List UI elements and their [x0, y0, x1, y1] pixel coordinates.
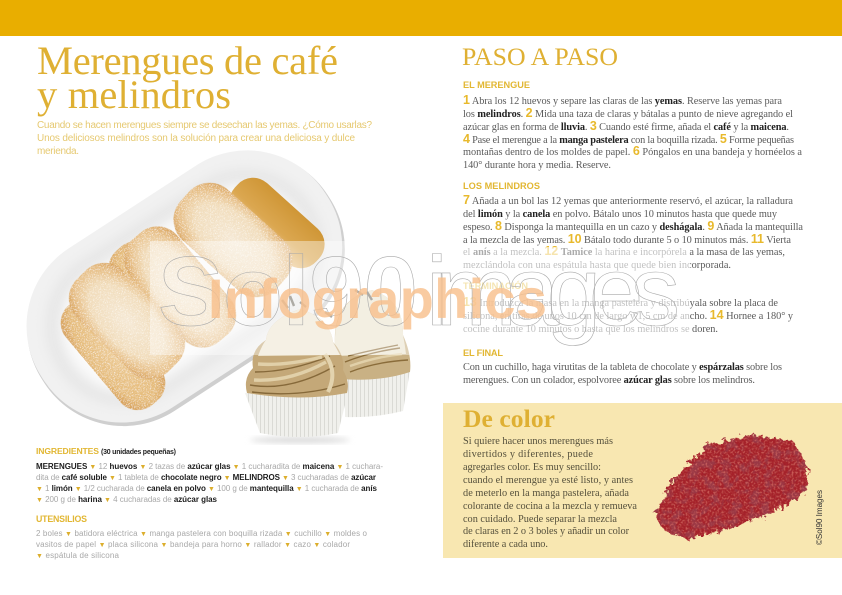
panel background	[443, 403, 842, 558]
section: el merengue: montañas dentro de los moldes de papel. 6 Póngalos en una bandeja y hornéelos a	[463, 144, 802, 158]
panel text: de claras en 2 o 3 boles y añadir un color	[463, 526, 630, 537]
section: el final: Con un cuchillo, haga virutitas de la tableta de chocolate y espárzalas sobre los	[463, 362, 782, 373]
title	[37, 38, 338, 117]
panel text: colorante de cocina a la mezcla y remueva	[463, 501, 637, 512]
utensils list: vasitos de papel ▼ placa silicona ▼ bandeja para horno ▼ rallador ▼ cazo ▼ colador	[36, 540, 350, 549]
photo: cupcakes	[245, 290, 410, 443]
utensils list: 2 boles ▼ batidora eléctrica ▼ manga pastelera con boquilla rizada ▼ cuchillo ▼ moldes o	[36, 529, 368, 538]
section: los melindros: espeso. 8 Disponga la mantequilla en un cazo y deshágala. 9 Añada la mantequilla	[463, 219, 803, 233]
section: los melindros: mezclándola con una espátula hasta que quede bien incorporada.	[463, 260, 731, 271]
section: los melindros	[463, 181, 803, 271]
section: el merengue: 140° durante hora y media. Reserve.	[463, 160, 611, 171]
panel heading: De color	[463, 404, 555, 433]
photo credit: ©Sol90 Images	[815, 490, 824, 545]
section: los melindros: LOS MELINDROS	[463, 181, 540, 191]
melindro: bottom biscuit	[51, 286, 175, 420]
melindro: front biscuit	[58, 252, 196, 390]
section: terminación: TERMINACIÓN	[463, 280, 528, 291]
melindro: middle biscuit	[100, 232, 210, 348]
section: terminación: 13 Introduzca la masa en la manga pastelera y distribúyala sobre la placa de	[463, 295, 778, 309]
heading: paso a paso: PASO A PASO	[462, 42, 618, 71]
panel text	[463, 436, 637, 550]
cupcake shadow	[250, 437, 350, 443]
section: los melindros: a la mezcla de las yemas. 10 Bátalo todo durante 5 o 10 minutos más. 11 Vierta	[463, 232, 791, 246]
watermark: Infographics: Infographics	[208, 267, 547, 330]
section: el merengue: azúcar glas en forma de lluvia. 3 Cuando esté firme, añada el café y la maicena.	[463, 119, 789, 133]
intro text	[37, 120, 372, 157]
top yellow bar	[0, 0, 842, 36]
panel text: de meterlo en la manga pastelera, añada	[463, 488, 629, 499]
watermark panel	[150, 241, 690, 355]
ingredients list: ▼ 1 limón ▼ 1/2 cucharada de canela en polvo ▼ 100 g de mantequilla ▼ 1 cucharada de anís	[36, 484, 378, 493]
ingredients list: MERENGUES ▼ 12 huevos ▼ 2 tazas de azúcar glas ▼ 1 cucharadita de maicena ▼ 1 cuchara-	[36, 462, 383, 471]
photo: plate with melindros	[0, 114, 381, 462]
ingredients heading	[36, 446, 176, 456]
section: el merengue: los melindros. 2 Mida una taza de claras y bátalas a punto de nieve agregando el	[463, 106, 793, 120]
plate	[0, 114, 381, 462]
section: el merengue: 1 Abra los 12 huevos y separe las claras de las yemas. Reserve las yemas para	[463, 93, 782, 107]
section: terminación	[463, 280, 794, 335]
melindro: centre biscuit	[113, 216, 247, 358]
utensils heading: UTENSILIOS	[36, 514, 87, 524]
panel text: Si quiere hacer unos merengues más	[463, 436, 613, 447]
ingredients list	[36, 462, 383, 504]
panel text: agregarles color. Es muy sencillo:	[463, 462, 601, 473]
ingredients heading: (30 unidades pequeñas)	[101, 449, 176, 456]
watermark: Sol90: Sol90	[158, 236, 418, 346]
utensils list: ▼ espátula de silicona	[36, 551, 120, 560]
panel text: con cuidado. Puede separar la mezcla	[463, 514, 617, 525]
section: el final: EL FINAL	[463, 348, 503, 358]
title: y melindros	[37, 72, 231, 117]
intro text: merienda.	[37, 146, 79, 157]
ingredients list: dita de café soluble ▼ 1 tableta de chocolate negro ▼ MELINDROS ▼ 3 cucharadas de azúcar	[36, 473, 376, 482]
section: terminación: cocine durante 10 minutos o hasta que los melindros se doren.	[463, 324, 718, 335]
section: los melindros: el anís a la mezcla. 12 Tamice la harina e incorpórela a la masa de las yemas,	[463, 244, 785, 258]
ingredients heading: INGREDIENTES	[36, 446, 99, 456]
melindro: dark back biscuit	[221, 169, 333, 277]
sprinkles	[282, 290, 372, 317]
panel: de color	[443, 403, 842, 558]
section: los melindros: del limón y la canela en polvo. Bátalo unos 10 minutos hasta que quede muy	[463, 209, 778, 220]
section: el final	[463, 348, 782, 386]
title: Merengues de café	[37, 38, 338, 83]
panel text: cuando el merengue ya esté listo, y antes	[463, 475, 633, 486]
section: terminación: silicona, en tiras de unos 10 cm de largo y 1,5 cm de ancho. 14 Hornee a 180° y	[463, 308, 794, 322]
section: el merengue: 4 Pase el merengue a la manga pastelera con la boquilla rizada. 5 Forme pequeñas	[463, 132, 794, 146]
intro text: Unos deliciosos melindros son la solución para crear una deliciosa y dulce	[37, 133, 355, 144]
watermark: images: images	[426, 236, 680, 346]
intro text: Cuando se hacen merengues siempre se desechan las yemas. ¿Cómo usarlas?	[37, 120, 372, 131]
section: el final: merengues. Con un colador, espolvoree azúcar glas sobre los melindros.	[463, 375, 755, 386]
ingredients list: ▼ 200 g de harina ▼ 4 cucharadas de azúcar glas	[36, 495, 218, 504]
back cupcake	[335, 290, 410, 417]
section: el merengue: EL MERENGUE	[463, 80, 530, 90]
panel text: divertidos y diferentes, puede	[463, 449, 593, 460]
utensils list	[36, 529, 368, 560]
panel text: diferente a cada uno.	[463, 539, 548, 550]
front cupcake	[245, 309, 348, 437]
photo: red powder	[655, 435, 808, 539]
section: los melindros: 7 Añada a un bol las 12 yemas que anteriormente reservó, el azúcar, la ralladura	[463, 193, 793, 207]
section: el merengue	[463, 80, 802, 171]
melindro: upper biscuit	[162, 171, 304, 309]
